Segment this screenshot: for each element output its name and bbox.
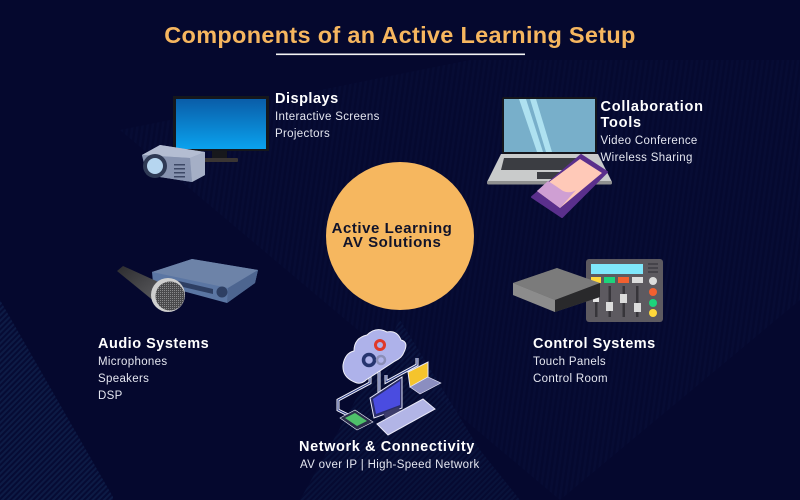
- icon: laptop and phone: [487, 97, 612, 217]
- panel: displays: [142, 91, 380, 182]
- text: displays items: Interactive Screens: [275, 111, 380, 123]
- heading: collaboration tools: Collaboration: [600, 99, 704, 115]
- heading: network and connectivity: Network & Connectivity: [299, 439, 475, 455]
- text: collaboration items: Wireless Sharing: [600, 152, 693, 164]
- heading: displays: Displays: [275, 91, 339, 107]
- panel: audio systems: [98, 259, 258, 402]
- text: control items: Touch Panels: [533, 356, 606, 368]
- center circle: Active Learning: [332, 220, 452, 237]
- heading: collaboration tools: Tools: [600, 115, 642, 131]
- panel: control systems: [513, 259, 663, 385]
- center circle: [326, 162, 474, 310]
- icon: cloud network: [338, 330, 441, 435]
- title: Components of an Active Learning Setup: [164, 22, 636, 48]
- text: audio items: Microphones: [98, 356, 167, 368]
- text: audio items: Speakers: [98, 373, 149, 385]
- panel: collaboration tools: [487, 97, 704, 217]
- center circle: AV Solutions: [343, 234, 441, 251]
- text: displays items: Projectors: [275, 128, 330, 140]
- text: audio items: DSP: [98, 390, 123, 402]
- panel: network and connectivity: [299, 330, 480, 471]
- heading: control systems: Control Systems: [533, 336, 656, 352]
- text: control items: Control Room: [533, 373, 608, 385]
- icon: microphone and receiver: [117, 259, 258, 312]
- text: network items: AV over IP | High-Speed Network: [300, 459, 480, 471]
- heading: audio systems: Audio Systems: [98, 336, 209, 352]
- text: collaboration items: Video Conference: [600, 135, 698, 147]
- icon: monitor and projector: [142, 96, 269, 182]
- icon: control mixer and drive: [513, 259, 663, 322]
